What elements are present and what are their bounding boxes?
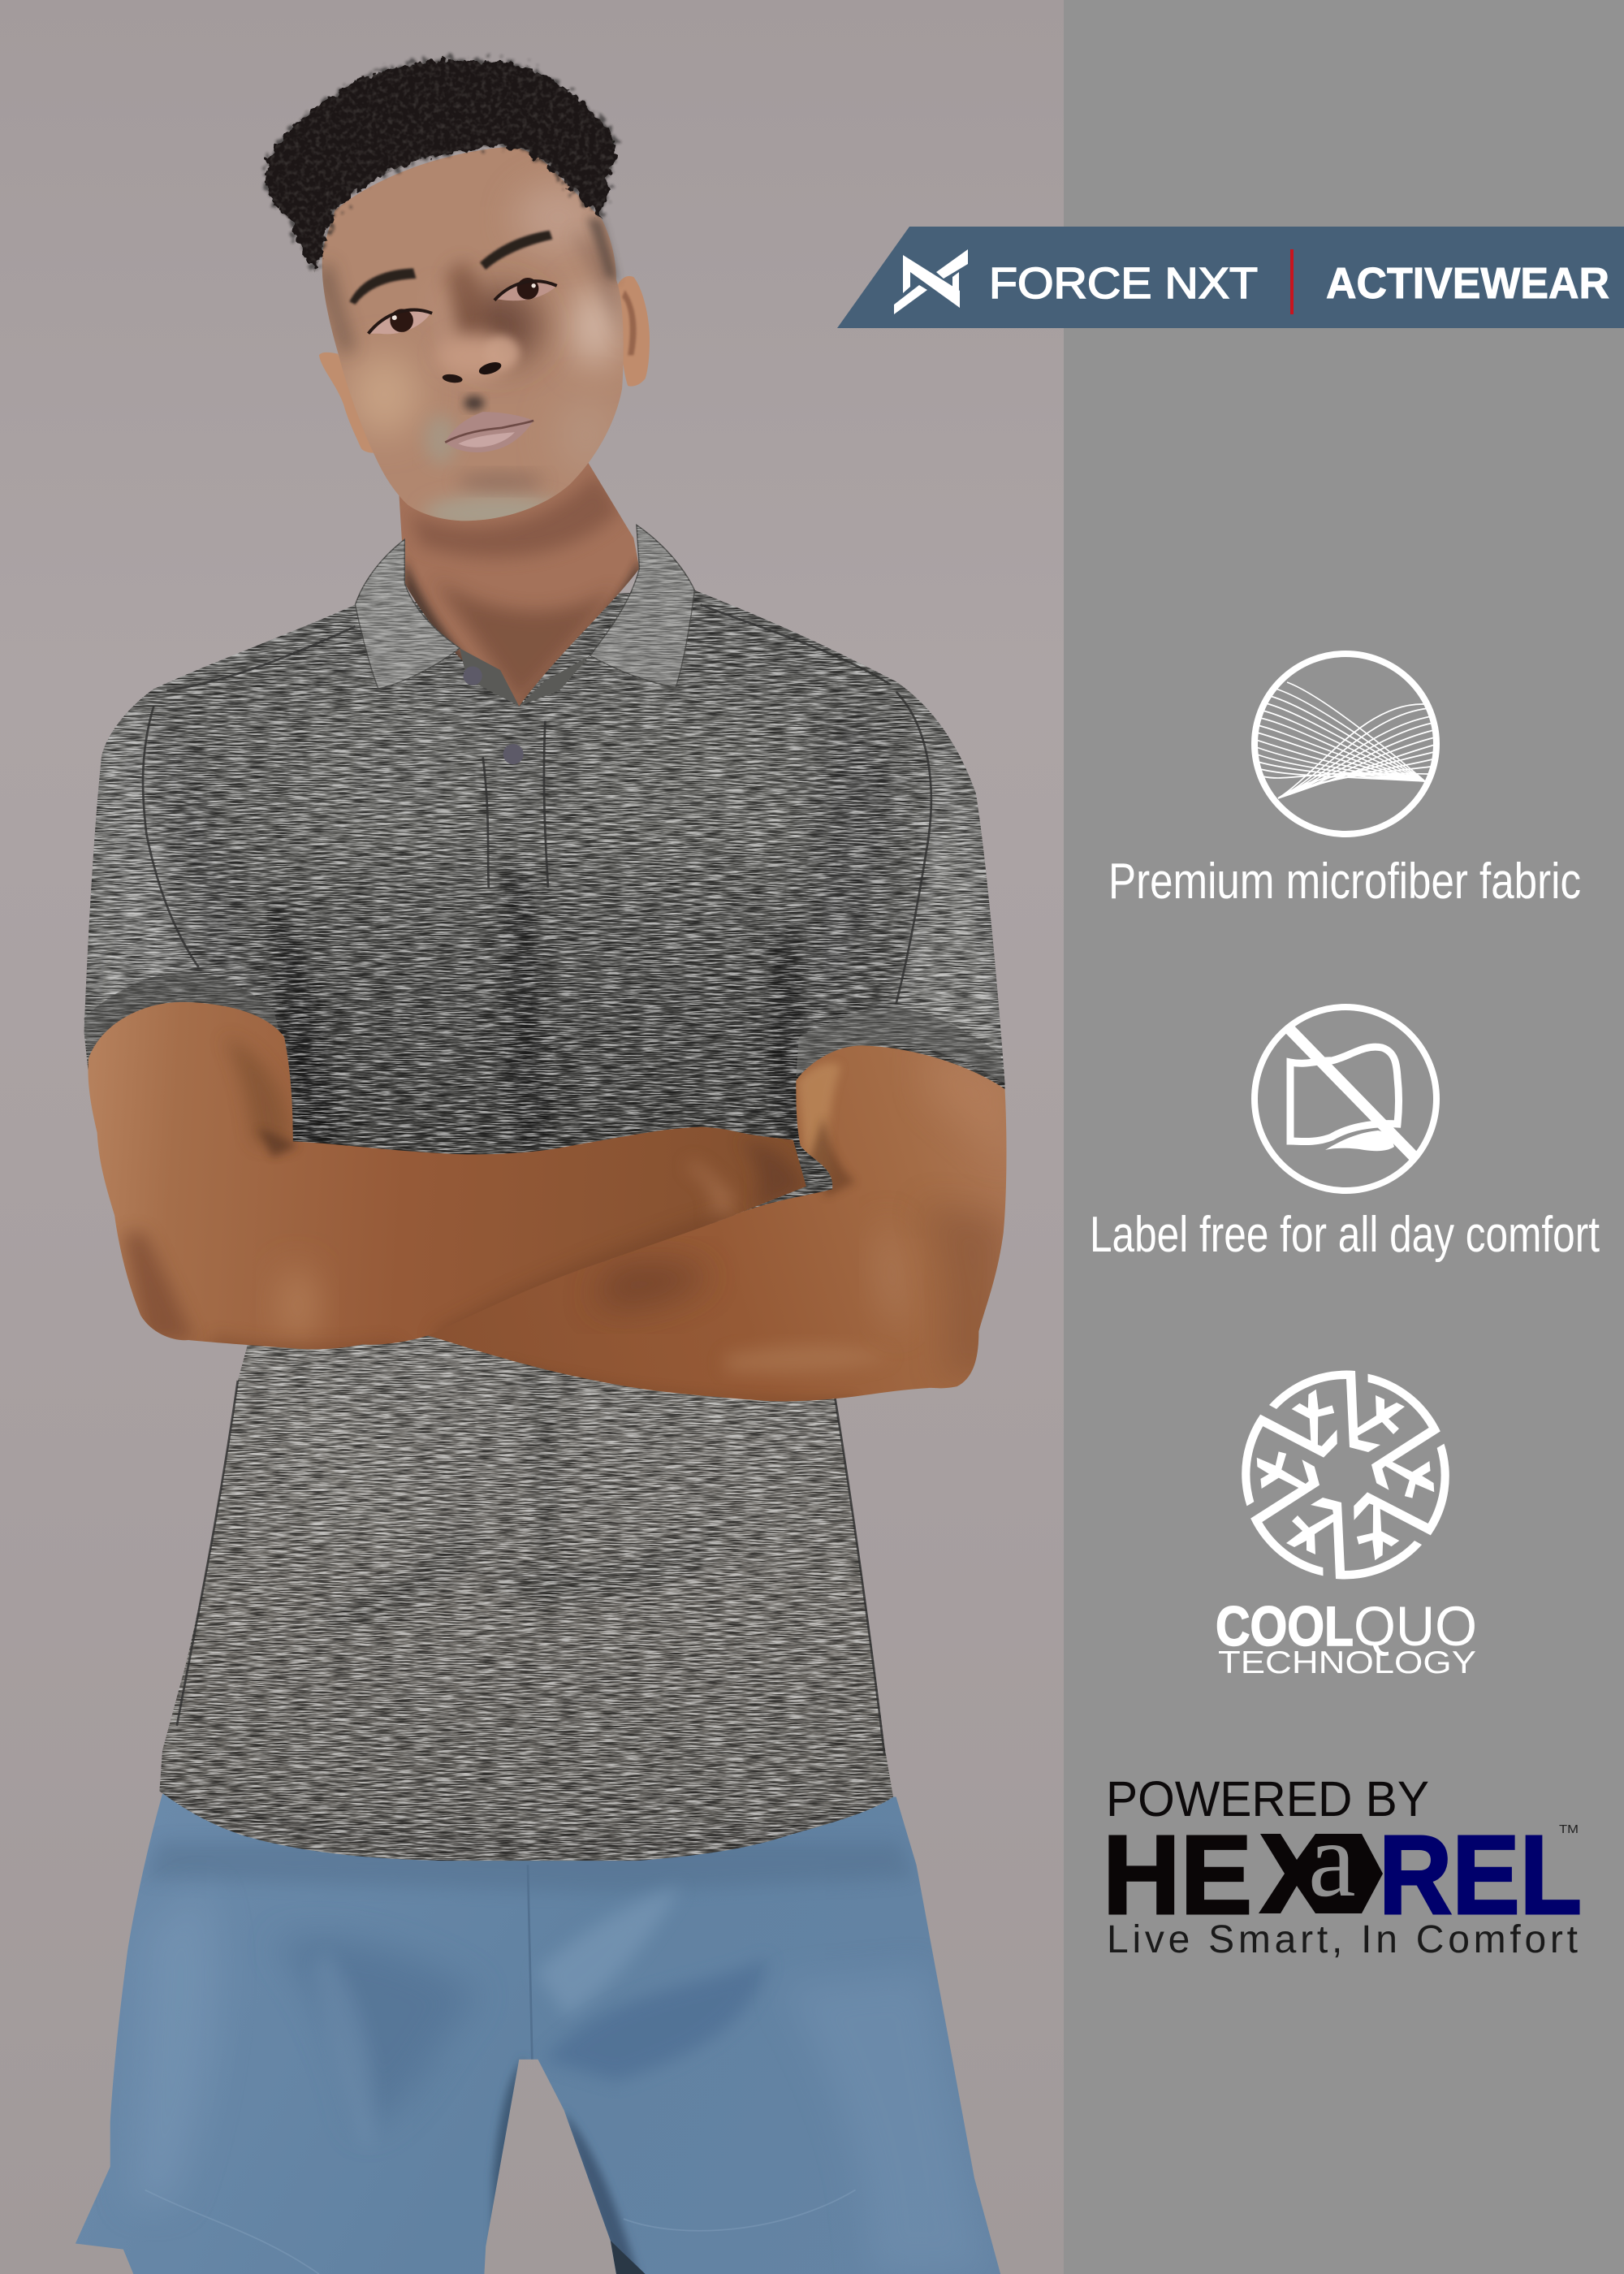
collar and hem fabric texture bbox=[58, 508, 1030, 1087]
arm: model's folded forearm on top bbox=[428, 1044, 1008, 1414]
sleeve hem bands bbox=[84, 971, 1004, 1083]
neck bbox=[399, 461, 642, 709]
technology wordmark: TECHNOLOGY bbox=[1218, 1645, 1476, 1680]
feature: premium microfiber fabric bbox=[1108, 654, 1581, 910]
brand banner bbox=[837, 227, 1624, 328]
polo collar and buttons bbox=[355, 525, 694, 764]
tagline: Live Smart, In Comfort bbox=[1107, 1918, 1578, 1961]
feature: coolquo technology bbox=[1216, 1356, 1477, 1680]
arm: model's forearm tucked under bbox=[88, 1002, 806, 1370]
feature: label free bbox=[1090, 1007, 1600, 1263]
coolquo wordmark: QUO bbox=[1354, 1595, 1477, 1658]
shirt seams bbox=[143, 605, 931, 1755]
photo: model in polo and shorts bbox=[58, 58, 1030, 2274]
banner divider bbox=[1290, 249, 1294, 314]
right grey panel bbox=[1064, 0, 1624, 2274]
logo: hexarel wordmark: TM bbox=[1559, 1822, 1579, 1836]
polo shirt body and sleeves bbox=[58, 580, 1030, 1871]
powered by: POWERED BY bbox=[1106, 1771, 1429, 1827]
icon: woven fabric curves in circle bbox=[1255, 654, 1436, 834]
logo: hexarel wordmark: HE bbox=[1103, 1813, 1252, 1938]
ears bbox=[319, 276, 650, 453]
eyebrows bbox=[349, 231, 552, 305]
icon: Force NXT logo mark bbox=[894, 249, 968, 314]
hexarel branding bbox=[1103, 1771, 1582, 1961]
logo: hexarel wordmark bbox=[1103, 1800, 1582, 1938]
brand name: FORCE NXT bbox=[989, 259, 1258, 308]
banner category: ACTIVEWEAR bbox=[1326, 259, 1609, 308]
icon: snowflake ring bbox=[1217, 1356, 1474, 1593]
heathered fabric texture bbox=[58, 580, 1030, 1871]
logo: hexarel wordmark: a bbox=[1308, 1800, 1356, 1919]
face bbox=[314, 146, 624, 532]
lips bbox=[445, 412, 533, 452]
coolquo wordmark: COOL bbox=[1216, 1595, 1354, 1658]
logo: hexarel wordmark: REL bbox=[1379, 1813, 1582, 1938]
eyes bbox=[369, 278, 557, 334]
nose bbox=[436, 334, 519, 410]
coolquo wordmark bbox=[1216, 1595, 1477, 1658]
icon: crossed out garment label bbox=[1255, 1007, 1436, 1191]
shorts bbox=[76, 1794, 1000, 2274]
photo background: studio backdrop bbox=[0, 0, 1064, 2274]
hair bbox=[261, 58, 624, 283]
